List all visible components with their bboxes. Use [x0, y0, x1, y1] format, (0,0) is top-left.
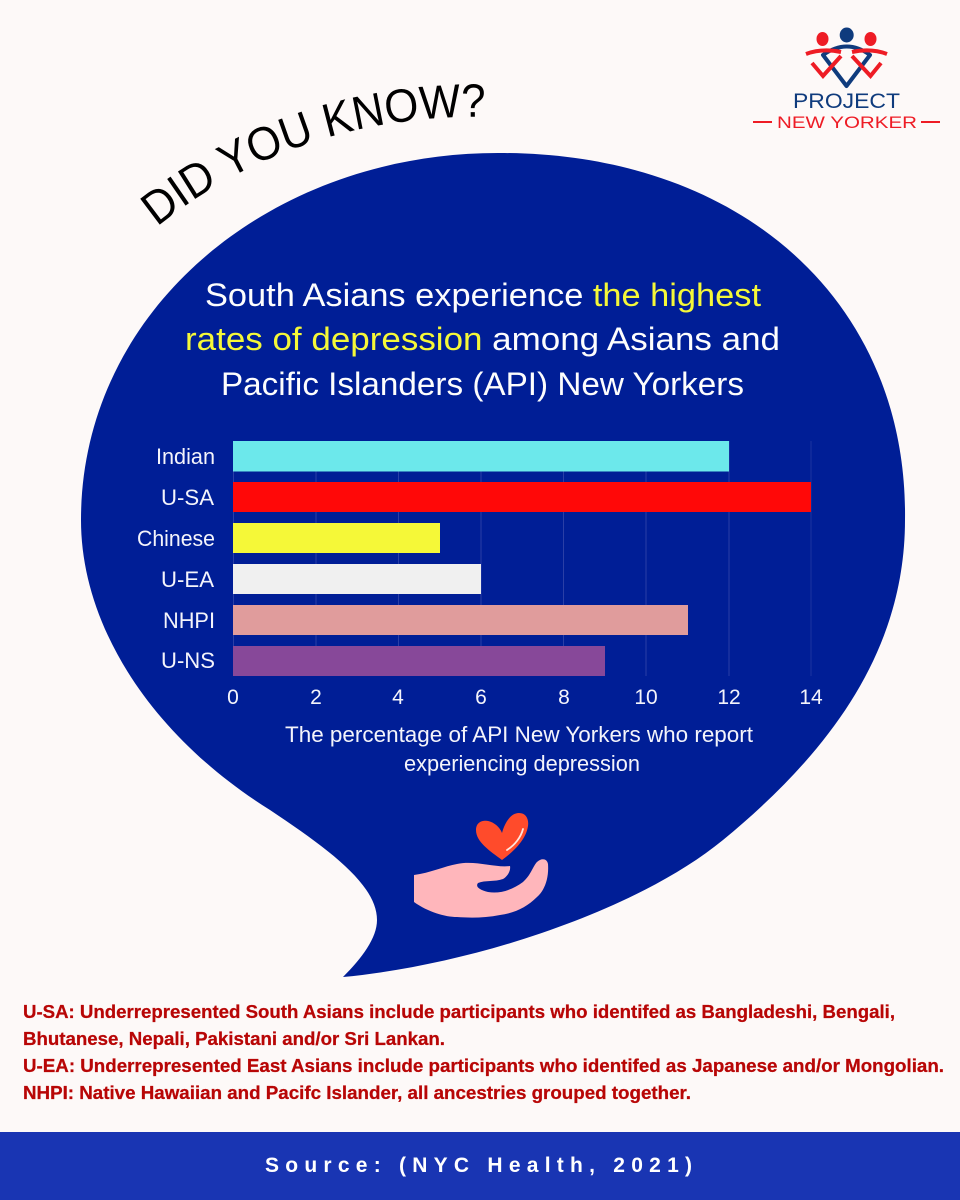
headline: rates of depression among Asians and — [185, 321, 780, 357]
footnotes: Bhutanese, Nepali, Pakistani and/or Sri Lankan. — [23, 1029, 445, 1049]
headline: Pacific Islanders (API) New Yorkers — [221, 366, 744, 402]
bar chart — [137, 441, 823, 776]
category labels: Indian — [156, 444, 215, 469]
category labels: NHPI — [163, 608, 215, 633]
axis labels — [227, 686, 823, 709]
footnotes — [23, 1002, 944, 1103]
axis labels: 0 — [227, 686, 239, 709]
axis labels: 14 — [799, 686, 823, 709]
logo wordmark: PROJECT — [793, 90, 900, 113]
headline: South Asians experience the highest — [205, 277, 761, 313]
logo subtitle: NEW YORKER — [777, 113, 917, 132]
category labels: U-NS — [161, 648, 215, 673]
axis labels: 12 — [717, 686, 741, 709]
bars — [233, 441, 811, 676]
icon: hand holding heart — [414, 813, 548, 918]
logo: Project New Yorker — [753, 28, 940, 132]
heading: did you know: DID YOU KNOW? — [140, 84, 484, 225]
axis labels: 4 — [392, 686, 404, 709]
axis labels: 10 — [634, 686, 658, 709]
source footer — [0, 1132, 960, 1200]
category labels: U-EA — [161, 567, 214, 592]
speech bubble — [81, 153, 905, 977]
axis labels: 2 — [310, 686, 322, 709]
grid lines — [234, 441, 811, 676]
hand — [414, 859, 548, 918]
heart — [476, 813, 528, 860]
axis title — [285, 722, 753, 776]
footnotes: U-SA: Underrepresented South Asians include participants who identifed as Bangladeshi, Bengali, — [23, 1002, 895, 1022]
category labels — [137, 444, 215, 673]
category labels: U-SA — [161, 485, 214, 510]
category labels: Chinese — [137, 526, 215, 551]
axis title: experiencing depression — [404, 751, 640, 776]
headline — [185, 277, 780, 402]
logo icon — [806, 28, 887, 86]
axis title: The percentage of API New Yorkers who report — [285, 722, 753, 747]
axis labels: 8 — [558, 686, 570, 709]
source text: Source: (NYC Health, 2021) — [265, 1154, 692, 1177]
axis labels: 6 — [475, 686, 487, 709]
footnotes: U-EA: Underrepresented East Asians include participants who identifed as Japanese and/or Mongolian. — [23, 1056, 944, 1076]
footnotes: NHPI: Native Hawaiian and Pacifc Islander, all ancestries grouped together. — [23, 1083, 691, 1103]
